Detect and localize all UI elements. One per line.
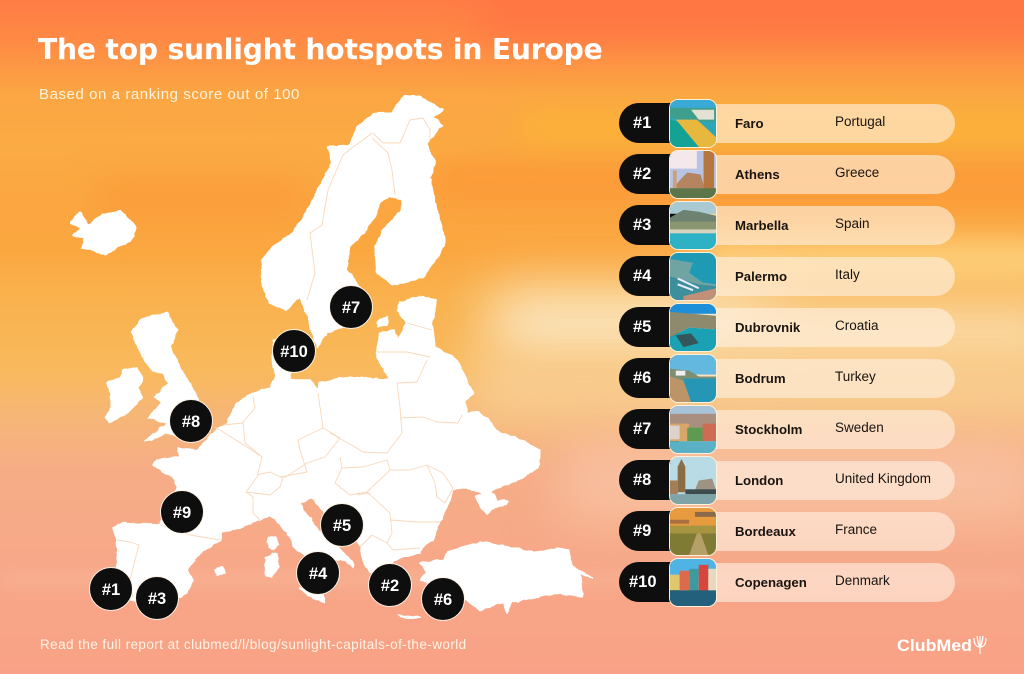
ranking row 9: Bordeaux: France [835,522,877,537]
ranking row 9: Bordeaux: #9 [633,522,651,540]
ranking row 3: Marbella: Spain [835,216,870,231]
ranking row 3: Marbella [619,201,955,250]
photo: Bordeaux [669,507,717,556]
photo: Bodrum [669,354,717,403]
ranking row 2: Athens [619,150,955,199]
ranking row 10: Copenhagen: #10 [629,573,657,591]
title: The top sunlight hotspots in Europe [38,33,603,66]
map marker #10: #10 [280,343,308,361]
photo: Dubrovnik [669,303,717,352]
ranking row 7: Stockholm: #7 [633,420,651,438]
ranking row 8: London: #8 [633,471,651,489]
photo: Stockholm [669,405,717,454]
ranking row 4: Palermo [619,252,955,301]
ranking row 5: Dubrovnik: #5 [633,318,651,336]
land masses [70,95,593,619]
ranking row 1: Faro: Portugal [835,114,885,129]
ranking row 1: Faro [619,99,955,148]
ranking row 5: Dubrovnik: Dubrovnik [735,320,800,335]
map marker #3: #3 [148,590,166,608]
ranking row 10: Copenhagen: Denmark [835,573,890,588]
ranking row 7: Stockholm [619,405,955,454]
ranking row 6: Bodrum [619,354,955,403]
ranking row 8: London: United Kingdom [835,471,931,486]
map marker #10 [272,329,316,373]
country borders [117,118,462,598]
photo: London [669,456,717,505]
photo: Faro [669,99,717,148]
map marker #4 [296,551,340,595]
icon: trident [974,636,986,654]
ranking row 3: Marbella: #3 [633,216,651,234]
ranking row 1: Faro: Faro [735,116,764,131]
map marker #5 [320,503,364,547]
map marker #9 [160,490,204,534]
photo: Palermo [669,252,717,301]
ranking row 7: Stockholm: Stockholm [735,422,802,437]
photo: Marbella [669,201,717,250]
ranking row 2: Athens: #2 [633,165,651,183]
ranking row 3: Marbella: Marbella [735,218,789,233]
ranking row 8: London [619,456,955,505]
ranking row 9: Bordeaux: Bordeaux [735,524,796,539]
photo: Copenhagen [669,558,717,607]
map marker #2: #2 [381,577,399,595]
ranking row 4: Palermo: #4 [633,267,651,285]
map marker #7: #7 [342,299,360,317]
ranking row 5: Dubrovnik [619,303,955,352]
ranking row 9: Bordeaux [619,507,955,556]
map marker #9: #9 [173,504,191,522]
map marker #7 [329,285,373,329]
map marker #6 [421,577,465,621]
ranking row 10: Copenhagen [619,558,955,607]
ranking row 10: Copenhagen: Copenagen [735,575,807,590]
map marker #3 [135,576,179,620]
ranking row 4: Palermo: Italy [835,267,860,282]
ranking row 2: Athens: Greece [835,165,879,180]
ranking row 1: Faro: #1 [633,114,651,132]
ranking row 8: London: London [735,473,783,488]
logo: Club Med: ClubMed [897,636,972,655]
ranking row 5: Dubrovnik: Croatia [835,318,879,333]
map marker #8: #8 [182,413,200,431]
footer link text: Read the full report at clubmed/l/blog/sunlight-capitals-of-the-world [40,637,467,652]
map marker #1 [89,567,133,611]
ranking row 6: Bodrum: #6 [633,369,651,387]
ranking row 4: Palermo: Palermo [735,269,787,284]
subtitle: Based on a ranking score out of 100 [39,86,300,103]
ranking row 2: Athens: Athens [735,167,780,182]
ranking row 6: Bodrum: Bodrum [735,371,786,386]
map marker #1: #1 [102,581,120,599]
photo: Athens [669,150,717,199]
map marker #2 [368,563,412,607]
map marker #8 [169,399,213,443]
ranking row 7: Stockholm: Sweden [835,420,884,435]
map marker #6: #6 [434,591,452,609]
ranking row 6: Bodrum: Turkey [835,369,876,384]
map marker #5: #5 [333,517,351,535]
map marker #4: #4 [309,565,328,583]
